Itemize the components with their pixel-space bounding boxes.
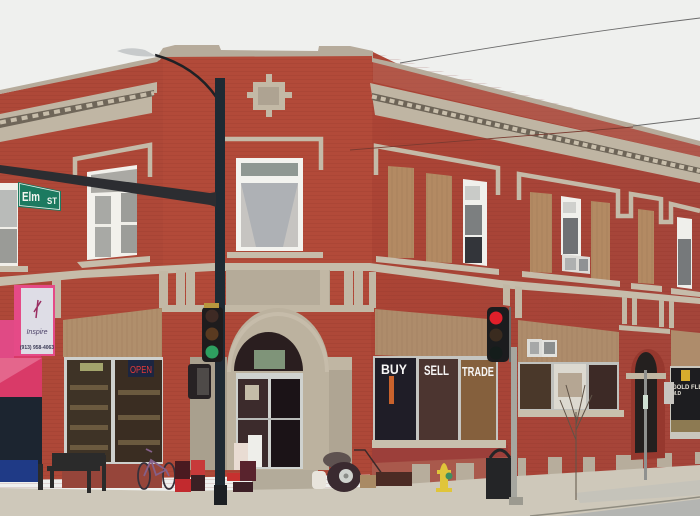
street pole with signal xyxy=(487,307,523,505)
fire hydrant xyxy=(436,463,452,492)
window: right wing two xyxy=(561,196,581,257)
double doors xyxy=(236,373,303,469)
upper windows xyxy=(0,158,692,289)
street sign: Elm St: Elm xyxy=(22,189,40,204)
bare young tree xyxy=(560,385,592,500)
window: right wing one xyxy=(463,179,487,266)
neon OPEN sign: OPEN xyxy=(130,365,152,376)
arched side doorway xyxy=(626,349,666,460)
stone medallion xyxy=(247,74,292,117)
window group: right shop xyxy=(518,362,624,417)
stone lintel trim xyxy=(75,139,700,222)
window: right wing three xyxy=(677,217,692,289)
street sign: Elm St: ST xyxy=(47,196,57,206)
left cornice xyxy=(0,82,157,142)
window: far left xyxy=(0,183,28,272)
sign: Inspire: Inspire xyxy=(26,329,48,336)
parapet cap xyxy=(0,45,700,146)
bicycle xyxy=(138,449,175,489)
window group: BUY SELL TRADE xyxy=(372,356,506,448)
street sign: Elm St xyxy=(18,182,61,211)
faded brick band xyxy=(373,62,700,157)
boxes by door xyxy=(227,461,256,492)
street light arm and pole xyxy=(117,48,227,505)
window group: BUY SELL TRADE: BUY xyxy=(381,361,408,377)
traffic signal: red xyxy=(487,307,511,362)
white buckets xyxy=(248,435,262,467)
sign pole right xyxy=(643,370,648,480)
step xyxy=(252,470,318,490)
foundation and brickwork base xyxy=(372,445,700,488)
traffic mast arm xyxy=(0,165,216,207)
bench xyxy=(38,453,106,493)
right cornice xyxy=(370,83,700,183)
sign: Inspire: (913) 958-4063 xyxy=(20,345,54,351)
red crates xyxy=(175,460,205,492)
window sills and main stone band xyxy=(0,256,700,304)
sidewalk and street xyxy=(0,465,700,516)
rear traffic signal xyxy=(188,364,211,399)
shop window: far right sign xyxy=(664,366,700,439)
pink awning xyxy=(0,320,42,397)
center entrance stonework xyxy=(190,308,352,490)
overhead wires xyxy=(350,18,700,150)
stone pilasters and lower belt xyxy=(52,270,674,334)
dark storefront glass xyxy=(0,396,42,468)
window group: BUY SELL TRADE: SELL xyxy=(424,362,449,378)
shop window: left with shelves xyxy=(64,357,163,464)
boarded windows right wing xyxy=(388,166,654,284)
air conditioner lower xyxy=(527,339,557,357)
brick planter under left window xyxy=(62,464,162,488)
shop window: far right sign: M.D xyxy=(672,391,682,397)
window: double sash xyxy=(77,165,150,268)
air conditioner upper xyxy=(562,254,590,274)
trash can xyxy=(486,450,511,499)
tan fascia panels xyxy=(63,308,700,367)
traffic signal: green xyxy=(202,303,223,362)
shop: pink awning storefront xyxy=(0,320,42,482)
roof cap and cornices xyxy=(0,45,700,183)
tires and jug xyxy=(312,450,412,492)
sign: Inspire xyxy=(14,285,55,356)
fanlight xyxy=(234,332,303,371)
window group: BUY SELL TRADE: TRADE xyxy=(462,364,494,379)
window: center with curtain xyxy=(227,158,323,258)
